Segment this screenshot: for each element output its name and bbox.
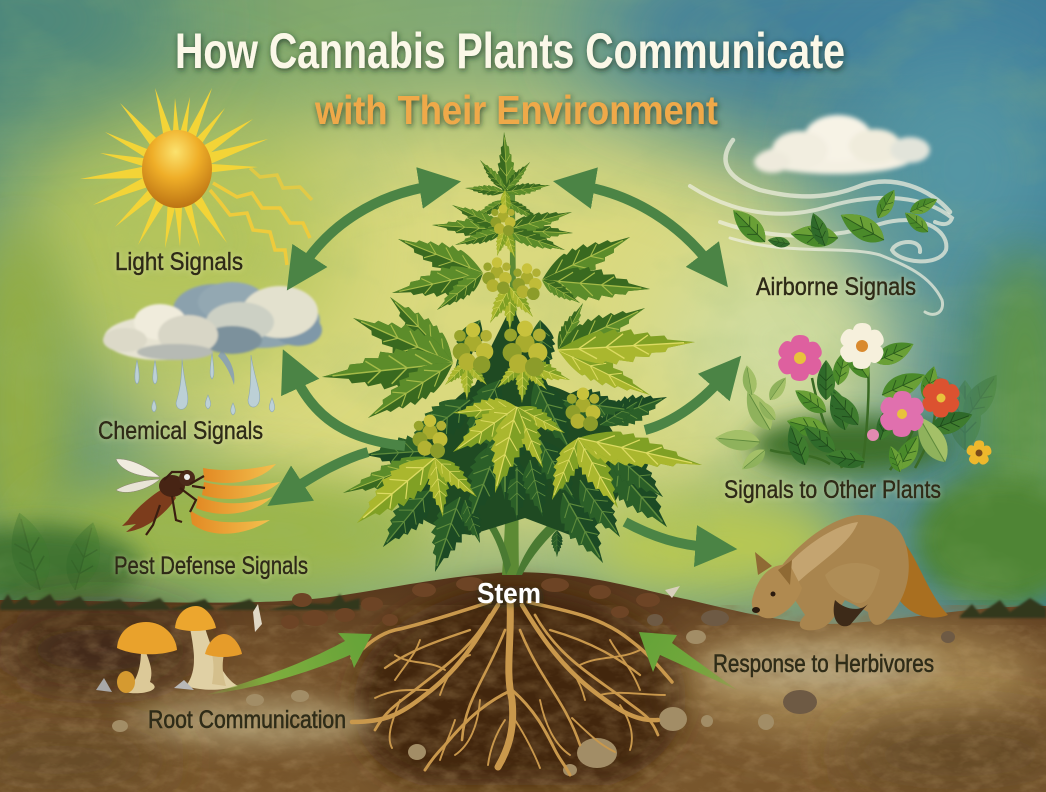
label: Pest Defense Signals: Pest Defense Signals — [114, 552, 308, 580]
title line 2: with Their Environment — [314, 87, 718, 133]
icon: light zigzag rays — [210, 168, 312, 265]
icon: flowering plants — [714, 323, 993, 475]
arrow: root communication — [205, 633, 372, 695]
leaves in the wind — [726, 186, 940, 250]
dark foliage mass — [400, 305, 625, 535]
arrow: plant to pest defense — [292, 452, 368, 490]
title — [175, 23, 845, 133]
mid left leaf — [320, 287, 463, 431]
flower: pink small — [877, 391, 927, 437]
leaves — [781, 335, 976, 475]
icon: sun with rays — [79, 85, 312, 265]
plumes — [190, 464, 280, 534]
arrow: plant to light signals and back — [303, 186, 432, 266]
small leaf by the stem — [551, 530, 563, 557]
label: Chemical Signals: Chemical Signals — [98, 417, 263, 445]
plant foliage — [320, 131, 706, 578]
body — [122, 486, 176, 532]
icon: herbivore animal — [752, 515, 948, 630]
cloud — [754, 115, 930, 174]
label: Signals to Other Plants: Signals to Other Plants — [724, 476, 941, 504]
stones — [112, 630, 774, 776]
label: Airborne Signals: Airborne Signals — [756, 273, 916, 301]
arrow: plant to other plants — [645, 378, 722, 430]
small yellow leaves — [441, 283, 573, 403]
flower: yellow — [965, 440, 993, 466]
arrow: response to herbivores roots — [639, 632, 737, 690]
top cola leaves — [431, 131, 574, 260]
icon: cloud and wind — [690, 115, 952, 314]
roots — [352, 600, 672, 775]
flower buds — [412, 204, 600, 458]
pale foliage — [714, 364, 791, 474]
icon: rain cloud — [103, 282, 322, 415]
label: Root Communication: Root Communication — [148, 706, 346, 734]
arrow: plant to chemical signals — [295, 376, 405, 446]
arrow: plant to airborne signals and back — [582, 186, 710, 264]
lower bright leaves — [338, 395, 706, 537]
label: Light Signals: Light Signals — [115, 248, 243, 276]
flower: pink — [775, 335, 825, 381]
icon: insect with defensive plumes — [116, 459, 280, 535]
label: Response to Herbivores: Response to Herbivores — [713, 650, 934, 678]
title line 1: How Cannabis Plants Communicate — [175, 23, 845, 79]
grass edge — [0, 594, 1046, 618]
faded background plants — [2, 368, 1007, 595]
icon: mushrooms — [96, 606, 242, 693]
label: Stem: Stem — [477, 578, 541, 610]
third tier leaves — [389, 223, 651, 317]
surface clods — [281, 577, 660, 629]
lower dark leaves — [364, 314, 682, 578]
mid right leaf — [551, 294, 696, 407]
wings — [116, 459, 160, 477]
flower: white — [837, 323, 887, 369]
stem — [470, 180, 576, 575]
arrow: plant to herbivore response — [625, 522, 708, 547]
ground: soil cross-section — [0, 572, 1046, 792]
flower: red — [920, 378, 962, 418]
